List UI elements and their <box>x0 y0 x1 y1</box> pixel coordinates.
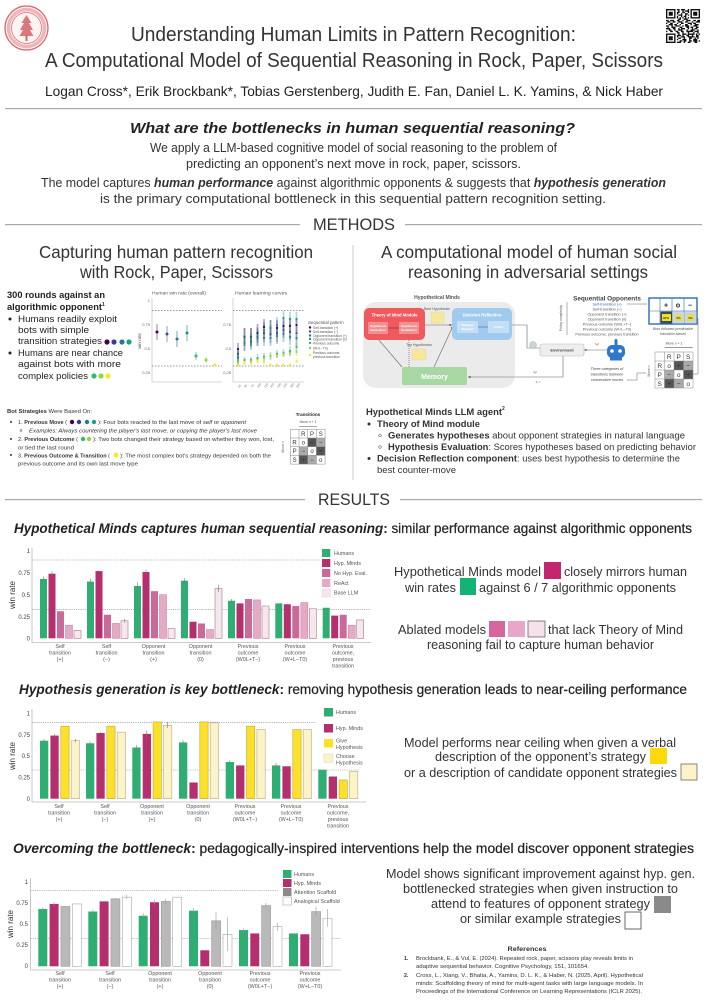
key findings text: complex policies <box>18 371 89 381</box>
theory of mind module: Theory of Mind Module <box>372 312 418 318</box>
chart: hypothesis generation bottleneck: 0.75 <box>18 733 31 739</box>
chart: scaffold interventions: transition <box>49 978 71 984</box>
intro text: We apply a LLM-based cognitive model of social reasoning to the problem of <box>150 141 558 155</box>
chart: hypothesis generation bottleneck: outcome, <box>327 810 350 816</box>
memory box <box>402 367 467 385</box>
sequential opponents list: Previous outcome, previous transition <box>575 332 639 336</box>
legend <box>283 870 340 905</box>
chart: scaffold interventions: 1 <box>25 880 29 886</box>
intro text: is the primary computational bottleneck in this sequential pattern recognition setting. <box>100 192 606 206</box>
chart: win rate across models: 0.25 <box>18 615 31 621</box>
chart: human learning curves <box>223 290 347 389</box>
transitions matrix: P <box>677 354 681 361</box>
bot strategies text: ): Four bots reacted to the last move of self or opponent <box>98 420 246 426</box>
chart: human win rate overall <box>137 290 222 382</box>
environment box <box>530 342 599 384</box>
diagram: hypothetical minds architecture: Hypothetical Minds <box>414 295 460 301</box>
sequential opponents list: Opponent transition (+) <box>588 312 627 316</box>
transitions matrix: + <box>686 372 690 379</box>
result 3 text <box>386 867 695 929</box>
chart: hypothesis generation bottleneck: Previous <box>328 804 349 810</box>
memory box: Memory <box>421 374 448 381</box>
transitions matrix: o <box>319 458 323 464</box>
decision reflection component: Subgoal <box>462 323 474 327</box>
research question: What are the bottlenecks in human sequential reasoning? <box>130 121 575 137</box>
chart: hypothesis generation bottleneck: Opponent <box>140 804 164 810</box>
chart: scaffold interventions: transition <box>99 978 121 984</box>
authors: Logan Cross*, Erik Brockbank*, Tobias Gerstenberg, Judith E. Fan, Daniel L. K. Yamins, & Nick Haber <box>45 83 663 99</box>
chart: win rate across models: transition <box>143 650 164 656</box>
chart: scaffold interventions: 0.5 <box>20 922 29 928</box>
chart: human learning curves: 40 <box>243 383 248 389</box>
best-followed table: + <box>664 302 668 310</box>
result 1 text: Hypothetical Minds model <box>394 565 541 579</box>
transitions matrix: P <box>293 449 297 455</box>
theory of mind module: Generation <box>370 328 386 332</box>
chart: human learning curves: 190 <box>276 382 282 389</box>
chart: hypothesis generation bottleneck: (W0L+T−) <box>233 817 257 823</box>
chart: win rate across models: (0) <box>197 657 204 663</box>
decision reflection component: Manager <box>461 327 474 331</box>
title <box>45 24 663 72</box>
intro text <box>41 141 666 206</box>
chart: human learning curves: 0.75 <box>223 322 232 327</box>
references: 1. <box>404 956 409 962</box>
agent description text <box>366 406 696 475</box>
decision reflection component: Decision Reflection <box>463 312 502 318</box>
chart: human learning curves: 130 <box>263 382 269 389</box>
chart: human learning curves: 0.25 <box>223 370 232 375</box>
chart: hypothesis generation bottleneck: Previous <box>235 804 256 810</box>
title: A Computational Model of Sequential Reasoning in Rock, Paper, Scissors <box>45 50 663 72</box>
chart: win rate across models: outcome, <box>332 650 355 656</box>
sequential opponents list: Sequential Opponents <box>573 296 641 302</box>
legend: Base LLM <box>334 590 359 596</box>
transitions matrix: Three categories of <box>591 367 624 371</box>
bot strategies text: 2. Previous Outcome ( <box>18 437 78 443</box>
legend: Hyp. Minds <box>336 726 363 732</box>
result 3 text: bottlenecked strategies when given instruction to <box>403 882 678 896</box>
chart: win rate across models: (+) <box>150 657 157 663</box>
agent description text: 2 <box>502 406 505 412</box>
key findings text: transition strategies <box>18 336 103 346</box>
chart: win rate across models: Previous <box>333 644 354 650</box>
chart: human learning curves: 280 <box>295 382 301 389</box>
transitions matrix: Move n <box>281 441 285 453</box>
chart: scaffold interventions: (−) <box>107 984 114 990</box>
decision reflection component: Action <box>494 325 503 329</box>
key findings text: bots with simple <box>18 325 89 335</box>
transitions matrix: P <box>310 432 314 438</box>
legend: Humans <box>294 872 314 878</box>
chart: win rate across models: Self <box>55 644 65 650</box>
chart: win rate across models: 0.75 <box>18 571 31 577</box>
agent description text: best counter-move <box>377 465 456 475</box>
environment box: s, r <box>536 380 541 384</box>
section heading: results: RESULTS <box>318 490 390 509</box>
heading <box>39 242 313 282</box>
chart: win rate across models: transition <box>332 664 354 670</box>
chart: win rate across models: outcome <box>285 650 305 656</box>
legend: sequential pattern: Opponent transition (0) <box>313 338 347 342</box>
agent description text: Hypothetical Minds LLM agent <box>366 407 502 417</box>
heading: A computational model of human social <box>381 242 677 262</box>
legend: ReAct <box>334 581 349 587</box>
best-followed table: 90% <box>663 316 669 320</box>
key findings text: Humans readily exploit <box>18 314 118 324</box>
transitions matrix: − <box>677 381 681 388</box>
chart: scaffold interventions: Previous <box>300 971 321 977</box>
transitions matrix: − <box>319 440 323 446</box>
legend: Hyp. Minds <box>334 561 361 567</box>
decision reflection component <box>452 308 512 340</box>
theory of mind module: Hypothesis <box>370 324 386 328</box>
references: Cross, L., Xiang, V., Bhatia, A., Yamins, D. L. K., & Haber, N. (2025, April). Hypothetical <box>416 973 643 979</box>
result 3 text: or similar example strategies <box>460 912 621 926</box>
legend: sequential pattern <box>308 320 347 359</box>
chart: hypothesis generation bottleneck: 0 <box>27 797 31 803</box>
chart: hypothesis generation bottleneck: (W+L−T0) <box>279 817 303 823</box>
legend: sequential pattern: Previous outcome, <box>313 351 340 355</box>
references: References <box>508 946 547 953</box>
environment box: Ψ <box>595 342 599 347</box>
transitions matrix: S <box>686 354 691 361</box>
chart: scaffold interventions: Opponent <box>148 971 172 977</box>
panel: computational model <box>363 242 698 475</box>
chart: win rate across models: transition <box>96 650 117 656</box>
chart: scaffold interventions: outcome <box>250 978 270 984</box>
transitions matrix: o <box>677 372 681 379</box>
result 2 text: or a description of candidate opponent strategies <box>404 766 677 780</box>
legend: Attention Scaffold <box>294 890 336 896</box>
chart: scaffold interventions: outcome <box>300 978 320 984</box>
key findings text: 1 <box>102 302 105 308</box>
legend: Choose <box>336 754 355 760</box>
transitions matrix: P <box>658 372 662 379</box>
chart: win rate across models: 0.5 <box>22 593 31 599</box>
heading: reasoning in adversarial settings <box>408 262 648 282</box>
sequential opponents list: Self-transition (+) <box>592 302 622 306</box>
chart: win rate across models: outcome <box>238 650 258 656</box>
legend: sequential pattern: Sequential pattern <box>308 320 344 325</box>
chart: hypothesis generation bottleneck <box>8 708 366 830</box>
chart: hypothesis generation bottleneck: previous <box>328 817 348 823</box>
chart: scaffold interventions: (W+L−T0) <box>298 984 322 990</box>
legend: Humans <box>336 710 356 716</box>
transitions matrix: o <box>667 363 671 370</box>
chart: win rate across models: (−) <box>103 657 110 663</box>
result 1 text: win rates <box>404 581 456 595</box>
result 3 heading: Overcoming the bottleneck: pedagogically-inspired interventions help the model discover opponent strategies <box>13 840 694 856</box>
result 3 text: attend to features of opponent strategy <box>431 897 651 911</box>
chart: win rate across models: transition <box>49 650 71 656</box>
transitions matrix: consecutive moves <box>591 378 623 382</box>
chart: scaffold interventions: Opponent <box>198 971 222 977</box>
sequential opponents list <box>559 296 647 336</box>
bot strategies text: 3. Previous Outcome & Transition ( <box>18 454 110 460</box>
chart: win rate across models: 0 <box>27 636 31 642</box>
intro block <box>41 121 666 206</box>
sticky notes: Best Hypothesis <box>424 307 450 311</box>
chart: win rate across models: transition <box>190 650 211 656</box>
chart: human learning curves: 220 <box>282 382 288 389</box>
chart: hypothesis generation bottleneck: 0.5 <box>22 754 31 760</box>
chart: human win rate overall: 1 <box>148 298 151 303</box>
theory of mind module <box>364 308 425 340</box>
transitions matrix: Move n + 1 <box>666 342 683 346</box>
chart: hypothesis generation bottleneck: Self <box>54 804 64 810</box>
theory of mind module: Evaluation <box>401 328 417 332</box>
transitions matrix: R <box>301 432 306 438</box>
transitions matrix: + <box>302 458 306 464</box>
chart: win rate across models: Opponent <box>142 644 166 650</box>
chart: human learning curves: 0.5 <box>225 346 232 351</box>
result 1 text: against 6 / 7 algorithmic opponents <box>479 581 676 595</box>
transitions matrix: R <box>667 354 672 361</box>
chart: scaffold interventions: Self <box>55 971 65 977</box>
transitions matrix: Move n + 1 <box>300 420 317 424</box>
chart: win rate across models: (W0L+T−) <box>236 657 260 663</box>
heading: with Rock, Paper, Scissors <box>79 262 273 282</box>
icon: university seal <box>5 6 48 50</box>
chart: hypothesis generation bottleneck: Opponent <box>186 804 210 810</box>
transitions matrix: o <box>310 449 314 455</box>
legend: sequential pattern: Self-transition (−) <box>313 330 338 334</box>
result 2 text: Model performs near ceiling when given a verbal <box>404 736 676 750</box>
key findings text <box>7 290 132 381</box>
chart: scaffold interventions: Previous <box>250 971 271 977</box>
chart: scaffold interventions: 0.75 <box>16 901 29 907</box>
references: Proceedings of the International Conference on Learning Representations (ICLR 2025). <box>416 989 642 995</box>
transitions matrix: − <box>667 372 671 379</box>
environment box: Environment <box>550 348 574 352</box>
intro text: The model captures human performance against algorithmic opponents & suggests that hypothesis generation <box>41 176 666 190</box>
transitions matrix: − <box>686 363 690 370</box>
transitions matrix: R <box>292 440 297 446</box>
chart: hypothesis generation bottleneck: transition <box>187 810 209 816</box>
transitions matrix: + <box>310 440 314 446</box>
bot strategies text: Examples: Always countering the player's last move, or copying the player's last move <box>29 428 258 434</box>
legend: sequential pattern: Self-transition (+) <box>313 326 338 330</box>
chart: hypothesis generation bottleneck: Self <box>100 804 110 810</box>
best-followed table: 5% <box>688 316 693 320</box>
transitions matrix: Transitions <box>296 412 321 417</box>
transitions matrix: o <box>686 381 690 388</box>
chart: win rate across models: Opponent <box>189 644 213 650</box>
transitions matrix: Move n <box>647 365 651 377</box>
references: minds: Scaffolding theory of mind for multi-agent tasks with large language models. In <box>416 981 643 987</box>
panel: human pattern recognition <box>7 242 347 468</box>
legend: sequential pattern: previous transition <box>313 355 340 359</box>
intro text: predicting an opponent’s next move in rock, paper, scissors. <box>186 157 521 171</box>
chart: human learning curves: 250 <box>289 382 295 389</box>
result 1 text: closely mirrors human <box>564 565 687 579</box>
transitions matrix <box>281 412 325 464</box>
result 1 text: that lack Theory of Mind <box>548 623 683 637</box>
chart: hypothesis generation bottleneck: Previous <box>281 804 302 810</box>
sticky notes <box>406 307 450 360</box>
result 3 text: Model shows significant improvement against hyp. gen. <box>386 867 695 881</box>
transitions matrix <box>591 318 698 388</box>
result 1 text: Ablated models <box>398 623 486 637</box>
legend <box>324 708 363 766</box>
best-followed table: 5% <box>676 316 681 320</box>
key findings text: Humans are near chance <box>18 348 123 358</box>
chart: win rate across models: win rate <box>8 580 17 610</box>
legend: Hypothesis <box>336 760 363 766</box>
bot strategies text: 1. Previous Move ( <box>18 420 67 426</box>
chart: win rate across models <box>8 548 371 670</box>
chart: scaffold interventions: Self <box>105 971 115 977</box>
transitions matrix: + <box>677 363 681 370</box>
transitions matrix: − <box>302 449 306 455</box>
transitions matrix: S <box>293 458 297 464</box>
chart: win rate across models: Previous <box>238 644 259 650</box>
chart: scaffold interventions: (+) <box>57 984 64 990</box>
agent description text: Hypothesis Evaluation: Scores hypotheses based on predicting behavior <box>388 442 696 452</box>
chart: hypothesis generation bottleneck: 0.25 <box>18 776 31 782</box>
chart: human win rate overall: 0.5 <box>144 346 151 351</box>
sequential opponents list: Previous outcome (W+L−T0) <box>583 328 632 332</box>
chart: human win rate overall: Human win rate (overall) <box>152 290 206 296</box>
heading: Capturing human pattern recognition <box>39 242 313 262</box>
transitions matrix: − <box>310 458 314 464</box>
references: Brockbank, E., & Vul, E. (2024). Repeated rock, paper, scissors play reveals limits in <box>416 956 633 962</box>
chart: scaffold interventions: transition <box>199 978 221 984</box>
sequential opponents list: Opponent transition (0) <box>588 318 627 322</box>
chart: human learning curves: 70 <box>250 383 255 389</box>
transitions matrix: S <box>319 432 323 438</box>
agent description text: Decision Reflection component : uses best hypothesis to determine the <box>377 454 680 464</box>
result 1 heading: Hypothetical Minds captures human sequential reasoning: similar performance against algorithmic opponents <box>14 520 692 536</box>
bot strategies text: or tied the last round <box>18 446 74 452</box>
legend: Hypothesis <box>336 745 363 751</box>
chart: hypothesis generation bottleneck: 1 <box>27 712 31 718</box>
legend: Humans <box>334 551 354 557</box>
transitions matrix: o <box>302 440 306 446</box>
transitions matrix: + <box>667 381 671 388</box>
chart: human win rate overall: 0.25 <box>142 370 151 375</box>
header <box>5 6 700 99</box>
sequential opponents list: Self-transition (−) <box>592 308 622 312</box>
agent description text: Generates hypotheses about opponent strategies in natural language <box>388 430 685 440</box>
transitions matrix: + <box>319 449 323 455</box>
chart: hypothesis generation bottleneck: (−) <box>102 817 109 823</box>
bot strategies text: ): Two bots changed their strategy based on whether they won, lost, <box>93 437 274 443</box>
result 2 text <box>404 736 697 780</box>
result 2 text: description of the opponent’s strategy <box>435 750 647 764</box>
sticky notes: Top Hypotheses <box>406 343 432 347</box>
chart: hypothesis generation bottleneck: transition <box>141 810 163 816</box>
icon: opponent robot <box>607 339 625 360</box>
key findings text: 300 rounds against an <box>7 290 105 300</box>
chart: hypothesis generation bottleneck: transition <box>94 810 116 816</box>
theory of mind module: Hypothesis <box>401 324 417 328</box>
chart: hypothesis generation bottleneck: (0) <box>195 817 201 823</box>
chart: scaffold interventions: (0) <box>207 984 213 990</box>
chart: human win rate overall: win rate <box>137 333 142 349</box>
best-followed table <box>649 298 697 336</box>
legend: sequential pattern: Previous outcome <box>313 342 340 346</box>
chart: hypothesis generation bottleneck: win rate <box>8 741 17 771</box>
chart: scaffold interventions: (+) <box>157 984 164 990</box>
chart: scaffold interventions: win rate <box>6 909 15 939</box>
key findings text: algorithmic opponent <box>7 302 102 312</box>
best-followed table: Bots followed predictable <box>653 327 693 331</box>
chart: scaffold interventions <box>6 870 341 990</box>
chart: hypothesis generation bottleneck: (+) <box>56 817 63 823</box>
agent description text: Theory of Mind module <box>377 419 480 429</box>
chart: scaffold interventions: 0.25 <box>16 943 29 949</box>
best-followed table: o <box>676 302 680 310</box>
legend: Analogical Scaffold <box>294 899 340 905</box>
legend: No Hyp. Eval. <box>334 571 367 577</box>
legend: Give <box>336 738 347 744</box>
chart: human learning curves: 160 <box>269 382 275 389</box>
icon: QR code <box>666 10 700 42</box>
title: Understanding Human Limits in Pattern Recognition: <box>131 24 576 46</box>
references: adaptive sequential behavior. Cognitive Psychology, 151, 101654. <box>416 964 589 970</box>
bot strategies text: ): The most complex bot's strategy depended on both the <box>120 454 271 460</box>
references <box>404 946 643 995</box>
chart: win rate across models: (+) <box>57 657 64 663</box>
legend <box>322 549 367 597</box>
best-followed table: transition biases <box>660 332 686 336</box>
chart: scaffold interventions: 0 <box>25 964 29 970</box>
chart: win rate across models: 1 <box>27 549 31 555</box>
result 2 heading: Hypothesis generation is key bottleneck: removing hypothesis generation leads to near-ceiling performance <box>19 681 687 697</box>
bot strategies text: Bot Strategies Were Based On: <box>7 409 92 415</box>
chart: hypothesis generation bottleneck: (+) <box>149 817 156 823</box>
diagram: hypothetical minds architecture <box>363 295 625 388</box>
chart: win rate across models: Self <box>102 644 112 650</box>
sequential opponents list: Previous outcome (W0L+T−) <box>583 322 632 326</box>
best-followed table: − <box>688 302 692 310</box>
chart: human learning curves: 10 <box>237 383 242 389</box>
legend: sequential pattern: (W+L−T0) <box>313 346 328 350</box>
chart: hypothesis generation bottleneck: outcome <box>235 810 255 816</box>
chart: scaffold interventions: (W0L+T−) <box>248 984 272 990</box>
chart: hypothesis generation bottleneck: outcome <box>281 810 301 816</box>
chart: hypothesis generation bottleneck: transition <box>327 824 349 830</box>
chart: win rate across models: previous <box>333 657 353 663</box>
legend: Hyp. Minds <box>294 881 321 887</box>
chart: win rate across models: (W+L−T0) <box>283 657 307 663</box>
bot strategies text <box>7 409 274 468</box>
key findings text: against bots with more <box>18 359 121 369</box>
sequential opponents list: Policy complexity <box>559 305 563 331</box>
chart: hypothesis generation bottleneck: transition <box>48 810 70 816</box>
chart: human learning curves: Human learning curves <box>235 290 288 296</box>
legend: sequential pattern: Opponent transition (+) <box>313 334 347 338</box>
chart: human win rate overall: 0.75 <box>142 322 151 327</box>
section heading: methods: METHODS <box>313 215 395 234</box>
chart: scaffold interventions: transition <box>149 978 171 984</box>
references: 2. <box>404 973 409 979</box>
heading <box>381 242 677 282</box>
environment box: Ψ <box>533 370 537 375</box>
chart: win rate across models: Previous <box>285 644 306 650</box>
transitions matrix: R <box>657 363 662 370</box>
transitions matrix: transitions between <box>591 372 623 376</box>
chart: human learning curves: 100 <box>256 382 262 389</box>
transitions matrix: S <box>658 381 663 388</box>
result 1 text <box>394 562 687 652</box>
bot strategies text: previous outcome and its own last move type <box>18 462 138 468</box>
result 1 text: reasoning fail to capture human behavior <box>427 638 654 652</box>
